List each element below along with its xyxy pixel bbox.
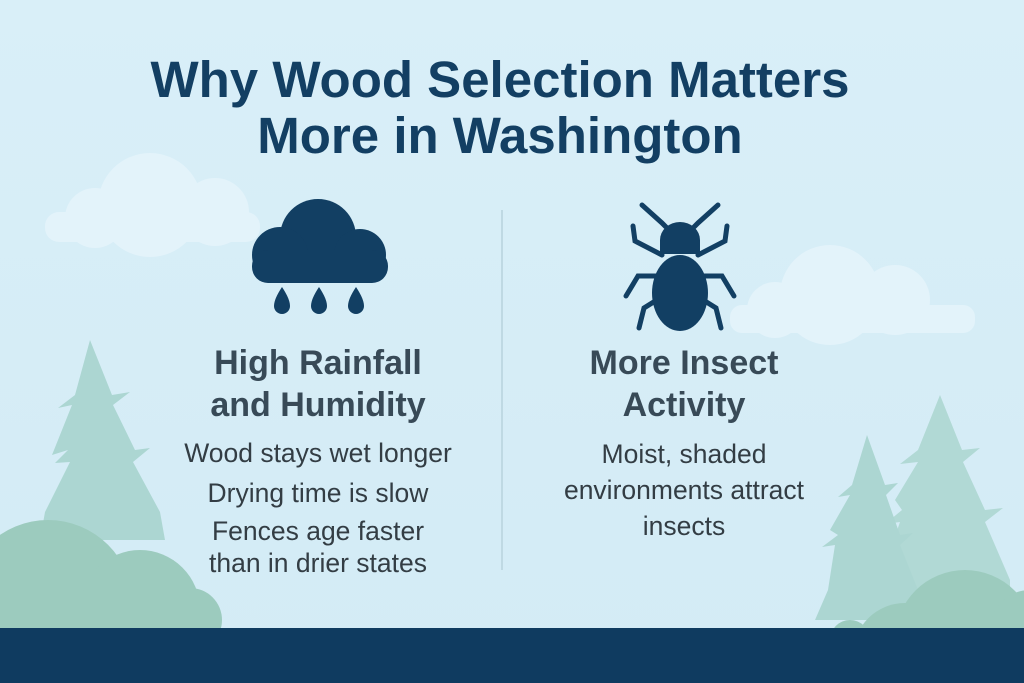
text: insects: environments attract — [564, 475, 804, 505]
text: rainfall points: than in drier states — [209, 548, 427, 578]
bushes right — [830, 570, 1024, 683]
heading: rainfall — [210, 344, 426, 424]
title: Why Wood Selection Matters — [151, 51, 849, 108]
cloud right — [730, 245, 975, 345]
footer bar — [0, 628, 1024, 683]
tree right front — [815, 435, 918, 620]
heading: insects: Activity — [623, 386, 745, 424]
heading: rainfall: and Humidity — [210, 386, 426, 424]
icon: rain cloud — [252, 199, 388, 314]
title — [150, 51, 849, 164]
icon: beetle — [624, 202, 736, 331]
text: insects: insects — [643, 511, 725, 541]
bushes left — [0, 520, 222, 683]
text: rainfall points: Fences age faster — [212, 516, 424, 546]
title: More in Washington — [257, 107, 743, 164]
tree left — [40, 340, 165, 540]
text: rainfall points — [184, 438, 452, 578]
divider — [501, 210, 503, 570]
text: insects: Moist, shaded — [602, 439, 766, 469]
cloud left — [45, 153, 260, 257]
tree right back — [880, 395, 1010, 630]
heading: insects: More Insect — [590, 344, 778, 382]
heading: rainfall: High Rainfall — [214, 344, 422, 382]
heading: insects — [590, 344, 778, 424]
text: rainfall points: Drying time is slow — [208, 478, 428, 508]
text: rainfall points: Wood stays wet longer — [184, 438, 452, 468]
text: insects — [564, 439, 804, 541]
